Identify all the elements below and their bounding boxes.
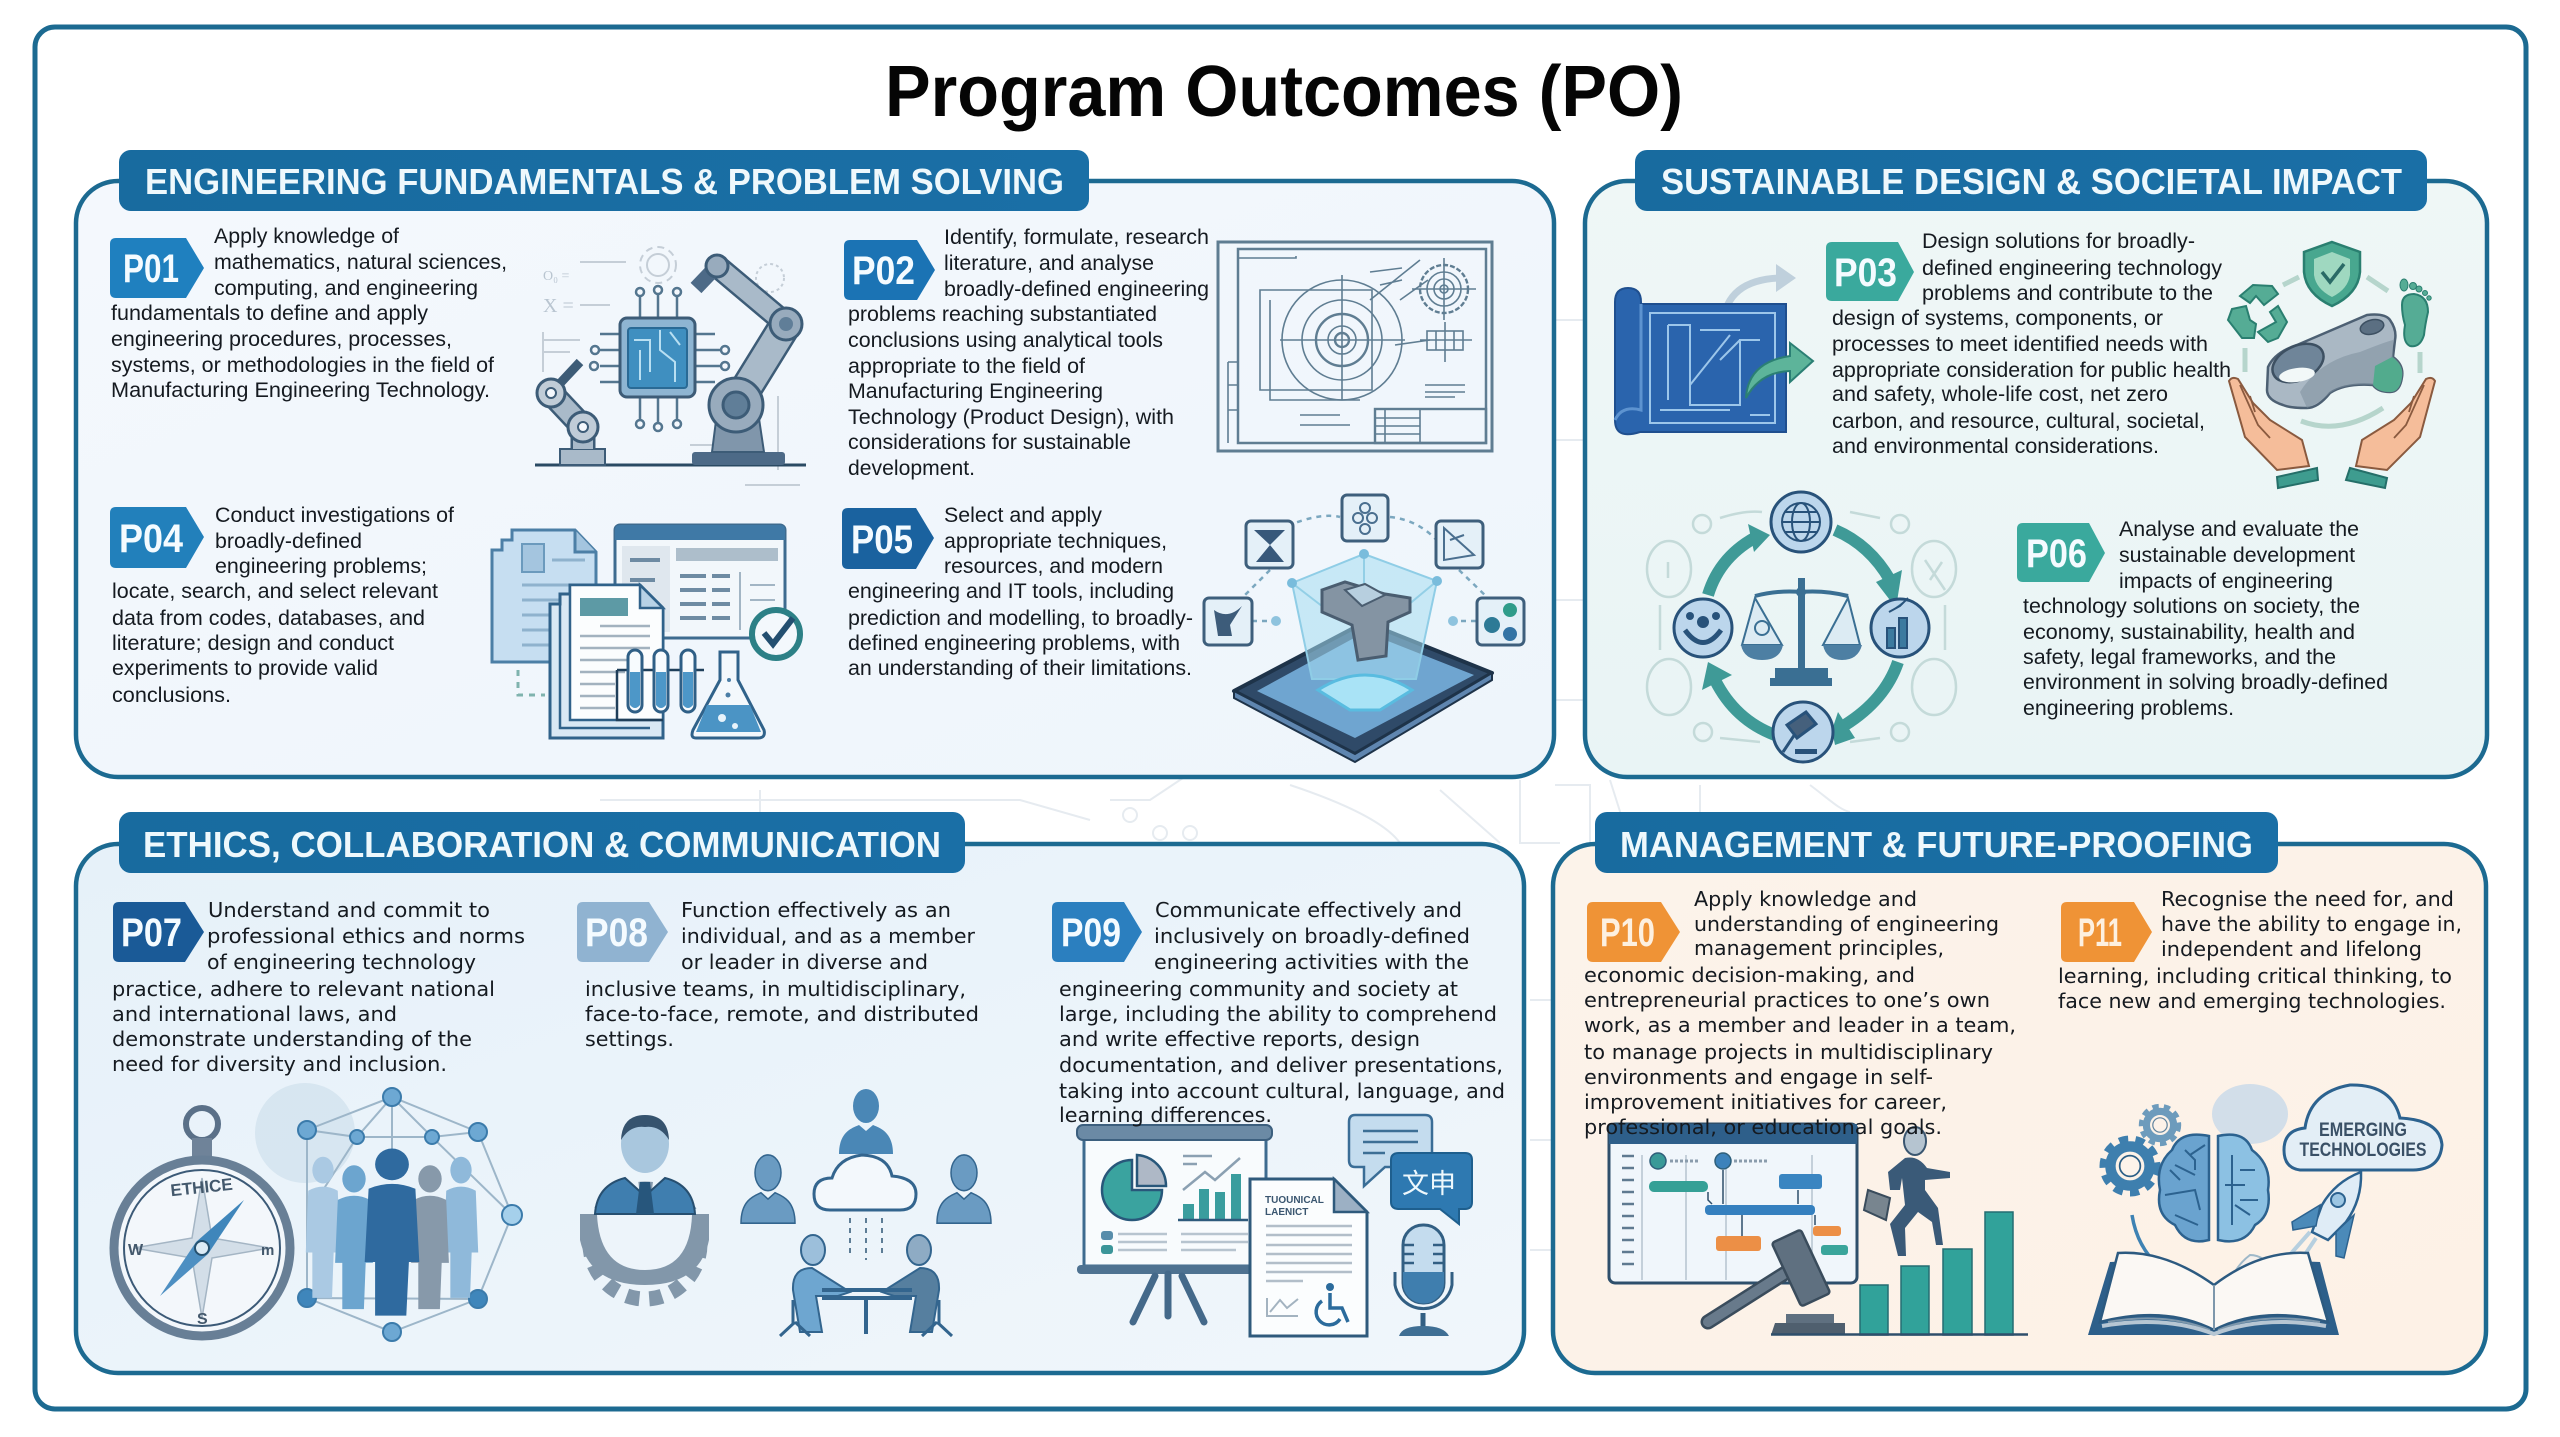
text P03: problems and contribute to the (1922, 281, 2213, 305)
panel: ethics, collaboration and communication (76, 812, 1524, 1373)
text P05: appropriate techniques, (944, 529, 1167, 553)
text P04: literature; design and conduct (112, 631, 394, 655)
text P06: Analyse and evaluate the (2119, 517, 2359, 541)
badge P06: P06 (2026, 532, 2087, 576)
text P07: demonstrate understanding of the (112, 1027, 472, 1051)
text P10: work, as a member and leader in a team, (1584, 1013, 2016, 1037)
badge P02 (844, 240, 935, 300)
illustration: ethics compass and diverse team network: W (128, 1242, 144, 1259)
text P03: Design solutions for broadly- (1922, 229, 2195, 253)
badge P04 (110, 507, 204, 568)
badge P02: P02 (852, 249, 915, 293)
text P07 (112, 898, 525, 1076)
text P10: improvement initiatives for career, (1584, 1090, 1947, 1114)
panel heading: sustainable design: SUSTAINABLE DESIGN & SOCIETAL IMPACT (1661, 161, 2402, 202)
P02 block (844, 225, 1209, 480)
text P10: understanding of engineering (1694, 912, 1999, 936)
text P01: Manufacturing Engineering Technology. (111, 378, 490, 402)
illustration: ethics compass and diverse team network: ETHICE (170, 1175, 234, 1200)
text P11: have the ability to engage in, (2161, 912, 2462, 936)
text P02: appropriate to the field of (848, 354, 1085, 378)
text P01: mathematics, natural sciences, (214, 250, 507, 274)
text P08: inclusive teams, in multidisciplinary, (585, 977, 966, 1001)
panel: engineering fundamentals and problem solving (76, 150, 1554, 777)
text P03: defined engineering technology (1922, 256, 2222, 280)
badge P05: P05 (851, 518, 913, 562)
text P07: practice, adhere to relevant national (112, 977, 495, 1001)
text P10: professional, or educational goals. (1584, 1115, 1942, 1139)
text P08: Function effectively as an (681, 898, 951, 922)
P04 block (110, 503, 454, 707)
badge P07: P07 (121, 911, 182, 955)
illustration: brain, book, rocket and emerging technologies cloud (2088, 1084, 2442, 1335)
text P01 (111, 224, 507, 402)
text P04: engineering problems; (215, 554, 427, 578)
illustration: ethics compass and diverse team network: S (197, 1311, 208, 1328)
text P05: Select and apply (944, 503, 1102, 527)
text P04: experiments to provide valid (112, 656, 378, 680)
badge P08 (577, 902, 668, 962)
text P07: professional ethics and norms (207, 924, 525, 948)
text P11: learning, including critical thinking, to (2058, 964, 2452, 988)
text P02: Identify, formulate, research (944, 225, 1209, 249)
badge P03: P03 (1834, 251, 1897, 295)
text P02: conclusions using analytical tools (848, 328, 1163, 352)
text P06: sustainable development (2119, 543, 2355, 567)
text P10: environments and engage in self- (1584, 1065, 1933, 1089)
illustration: robot arms and chip: X = (543, 295, 574, 317)
text P10: Apply knowledge and (1694, 887, 1917, 911)
P01 block (110, 224, 507, 402)
text P04: data from codes, databases, and (112, 606, 425, 630)
text P09: large, including the ability to comprehend (1059, 1002, 1497, 1026)
text P06: impacts of engineering (2119, 569, 2333, 593)
background circuit pattern (600, 320, 1850, 1250)
text P02: development. (848, 456, 975, 480)
text P08 (585, 898, 979, 1051)
text P04: broadly-defined (215, 529, 362, 553)
text P03: carbon, and resource, cultural, societal, (1832, 409, 2205, 433)
text P03: appropriate consideration for public health (1832, 358, 2231, 382)
P06 block (2017, 517, 2388, 720)
text P08: settings. (585, 1027, 674, 1051)
panel heading: management: MANAGEMENT & FUTURE-PROOFING (1620, 824, 2253, 865)
text P02: Manufacturing Engineering (848, 379, 1103, 403)
text P05 (848, 503, 1193, 680)
badge P07 (113, 902, 204, 962)
text P04: locate, search, and select relevant (112, 579, 438, 603)
text P10: economic decision-making, and (1584, 963, 1915, 987)
badge P01 (110, 238, 204, 298)
text P09: taking into account cultural, language, and (1059, 1079, 1505, 1103)
text P05: prediction and modelling, to broadly- (848, 606, 1193, 630)
text P10: entrepreneurial practices to one’s own (1584, 988, 1990, 1012)
panel heading: engineering fundamentals: ENGINEERING FUNDAMENTALS & PROBLEM SOLVING (145, 161, 1064, 202)
illustration: documents, database window and lab glassware (492, 525, 800, 738)
text P11: Recognise the need for, and (2161, 887, 2454, 911)
illustration: brain, book, rocket and emerging technologies cloud: EMERGING (2319, 1120, 2407, 1141)
text P09: inclusively on broadly-defined (1154, 924, 1470, 948)
text P02: considerations for sustainable (848, 430, 1131, 454)
illustration: gantt chart, gavel and career steps (1609, 1124, 2028, 1335)
text P10: management principles, (1694, 936, 1944, 960)
illustration: ethics compass and diverse team network (114, 1083, 522, 1341)
badge P11 (2061, 902, 2152, 962)
text P08: face-to-face, remote, and distributed (585, 1002, 979, 1026)
text P05: engineering and IT tools, including (848, 579, 1174, 603)
text P06 (2023, 517, 2388, 720)
illustration: leader on gear and remote team around cloud (580, 1089, 991, 1336)
illustration: balance scale with impact cycle (1647, 492, 1956, 762)
text P02: Technology (Product Design), with (848, 405, 1174, 429)
panel heading: ethics (119, 812, 965, 873)
text P06: economy, sustainability, health and (2023, 620, 2355, 644)
text P06: engineering problems. (2023, 696, 2234, 720)
text P11: face new and emerging technologies. (2058, 989, 2446, 1013)
illustration: ethics compass and diverse team network: m (261, 1242, 274, 1259)
badge P05 (842, 508, 934, 569)
text P07: Understand and commit to (208, 898, 490, 922)
text P09: engineering community and society at (1059, 977, 1458, 1001)
text P08: individual, and as a member (681, 924, 976, 948)
illustration: presentation board, report, translation bubbles and microphone: 文申 (1402, 1162, 1456, 1201)
text P09: and write effective reports, design (1059, 1027, 1420, 1051)
illustration: presentation board, report, translation bubbles and microphone: TUOUNICAL (1265, 1195, 1324, 1206)
P10 block (1584, 887, 2016, 1139)
text P09 (1059, 898, 1505, 1127)
panel heading: management (1595, 812, 2278, 873)
text P07: need for diversity and inclusion. (112, 1052, 447, 1076)
panel heading: ethics: ETHICS, COLLABORATION & COMMUNICATION (143, 824, 941, 865)
badge P01: P01 (123, 247, 179, 291)
illustration: rolled blueprint with arrows (1615, 264, 1813, 434)
illustration: tablet with 3D part hologram and tool icons (1204, 495, 1524, 762)
text P04: conclusions. (112, 683, 231, 707)
text P06: environment in solving broadly-defined (2023, 670, 2388, 694)
text P07: of engineering technology (207, 950, 476, 974)
badge P04: P04 (119, 517, 184, 561)
badge P08: P08 (585, 911, 648, 955)
P11 block (2058, 887, 2462, 1013)
badge P10: P10 (1600, 911, 1655, 955)
text P09: engineering activities with the (1154, 950, 1469, 974)
text P01: Apply knowledge of (214, 224, 399, 248)
panel: management and future-proofing (1553, 812, 2486, 1373)
text P03: processes to meet identified needs with (1832, 332, 2208, 356)
text P01: fundamentals to define and apply (111, 301, 428, 325)
title: Program Outcomes (PO) (885, 52, 1683, 132)
badge P11: P11 (2078, 911, 2122, 955)
panel heading: engineering fundamentals (119, 150, 1089, 211)
text P04: Conduct investigations of (215, 503, 454, 527)
text P03: design of systems, components, or (1832, 306, 2163, 330)
illustration: robot arms and chip: O₀ = (543, 269, 569, 284)
badge P09: P09 (1061, 911, 1121, 955)
text P01: computing, and engineering (214, 276, 478, 300)
text P09: learning differences. (1059, 1103, 1272, 1127)
text P05: resources, and modern (944, 554, 1163, 578)
panel: sustainable design and societal impact (1585, 150, 2487, 777)
illustration: hands holding part with sustainability icons (2228, 242, 2435, 488)
badge P06 (2017, 523, 2105, 582)
text P01: engineering procedures, processes, (111, 327, 452, 351)
text P03: and environmental considerations. (1832, 434, 2159, 458)
illustration: technical blueprint drawing (1218, 242, 1492, 451)
text P11: independent and lifelong (2161, 937, 2422, 961)
text P05: an understanding of their limitations. (848, 656, 1192, 680)
P05 block (842, 503, 1193, 680)
text P02: broadly-defined engineering (944, 277, 1209, 301)
text P08: or leader in diverse and (681, 950, 928, 974)
P03 block (1826, 229, 2231, 458)
badge P10 (1587, 902, 1680, 962)
badge P09 (1052, 902, 1142, 962)
text P09: documentation, and deliver presentations, (1059, 1053, 1503, 1077)
text P03: and safety, whole-life cost, net zero (1832, 382, 2168, 406)
text P02 (848, 225, 1209, 480)
text P02: literature, and analyse (944, 251, 1154, 275)
text P04 (112, 503, 454, 707)
illustration: robot arms and chip (535, 247, 806, 485)
text P05: defined engineering problems, with (848, 631, 1180, 655)
text P06: technology solutions on society, the (2023, 594, 2360, 618)
badge P03 (1826, 242, 1914, 301)
illustration: presentation board, report, translation bubbles and microphone: LAENICT (1265, 1207, 1308, 1218)
P09 block (1052, 898, 1505, 1127)
text P06: safety, legal frameworks, and the (2023, 645, 2336, 669)
panel heading: sustainable design (1635, 150, 2427, 211)
text P03 (1832, 229, 2231, 458)
P07 block (112, 898, 525, 1076)
illustration: presentation board, report, translation bubbles and microphone (1077, 1115, 1472, 1336)
text P10: to manage projects in multidisciplinary (1584, 1040, 1993, 1064)
text P01: systems, or methodologies in the field of (111, 353, 494, 377)
text P07: and international laws, and (112, 1002, 397, 1026)
text P10 (1584, 887, 2016, 1139)
text P09: Communicate effectively and (1155, 898, 1462, 922)
text P11 (2058, 887, 2462, 1013)
text P02: problems reaching substantiated (848, 302, 1157, 326)
illustration: brain, book, rocket and emerging technologies cloud: TECHNOLOGIES (2300, 1140, 2426, 1161)
P08 block (577, 898, 979, 1051)
